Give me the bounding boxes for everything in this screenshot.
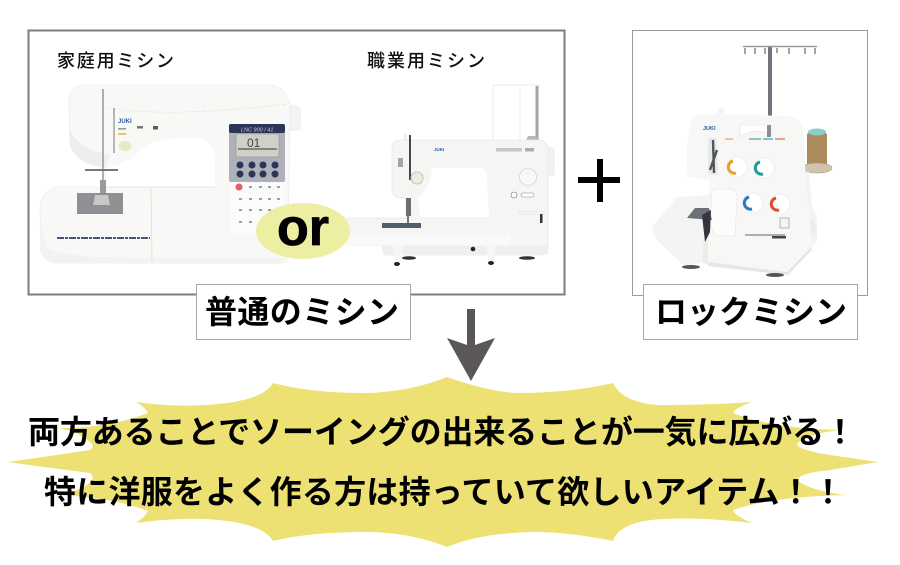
heading: overlock machine label xyxy=(644,284,858,340)
thread stand xyxy=(768,47,772,117)
side wheel xyxy=(795,170,817,250)
bed xyxy=(652,195,710,266)
body xyxy=(687,114,812,273)
handle hole xyxy=(740,125,772,137)
icon: home sewing machine: LNC 900 / 41 xyxy=(241,128,273,134)
front cover xyxy=(710,189,737,236)
label: home sewing machine: 家庭用ミシン xyxy=(57,51,174,71)
arrow: down xyxy=(447,309,495,381)
icon: overlock machine xyxy=(652,46,832,277)
dial: blue xyxy=(743,193,763,213)
dial: teal xyxy=(754,158,774,178)
icon: home sewing machine xyxy=(40,85,301,263)
heading: overlock machine label: ロックミシン xyxy=(655,294,847,330)
starburst shape xyxy=(8,377,878,547)
icon: professional sewing machine: JUKI xyxy=(434,147,444,152)
needle plate xyxy=(77,193,123,214)
logo: JUKI xyxy=(118,119,132,125)
message line 2: 特に洋服をよく作る方は持っていて欲しいアイテム！！ xyxy=(44,474,844,510)
slider xyxy=(57,237,150,239)
label: professional sewing machine: 職業用ミシン xyxy=(367,51,485,71)
heading: standard sewing machine label xyxy=(196,284,410,340)
needle bar xyxy=(102,89,104,190)
panel: overlock machine xyxy=(632,30,868,296)
dial: orange xyxy=(727,157,747,177)
icon: professional sewing machine xyxy=(347,85,555,266)
heading: standard sewing machine label: 普通のミシン xyxy=(205,294,399,330)
icon: home sewing machine: 01 xyxy=(247,136,261,150)
message line 1: 両方あることでソーイングの出来ることが一気に広がる！ xyxy=(28,414,856,450)
callout: or oval: or xyxy=(277,199,329,257)
control panel xyxy=(229,124,285,182)
callout: starburst with message xyxy=(8,377,878,547)
icon: plus sign xyxy=(578,159,620,202)
needle plate xyxy=(382,223,421,228)
icon: overlock machine: JUKI xyxy=(703,126,716,132)
callout: or oval xyxy=(256,199,350,259)
spool xyxy=(807,133,827,165)
thread guides xyxy=(708,137,718,175)
key pad xyxy=(230,182,284,234)
dial: red xyxy=(770,194,790,214)
panel: standard sewing machines xyxy=(28,30,564,294)
